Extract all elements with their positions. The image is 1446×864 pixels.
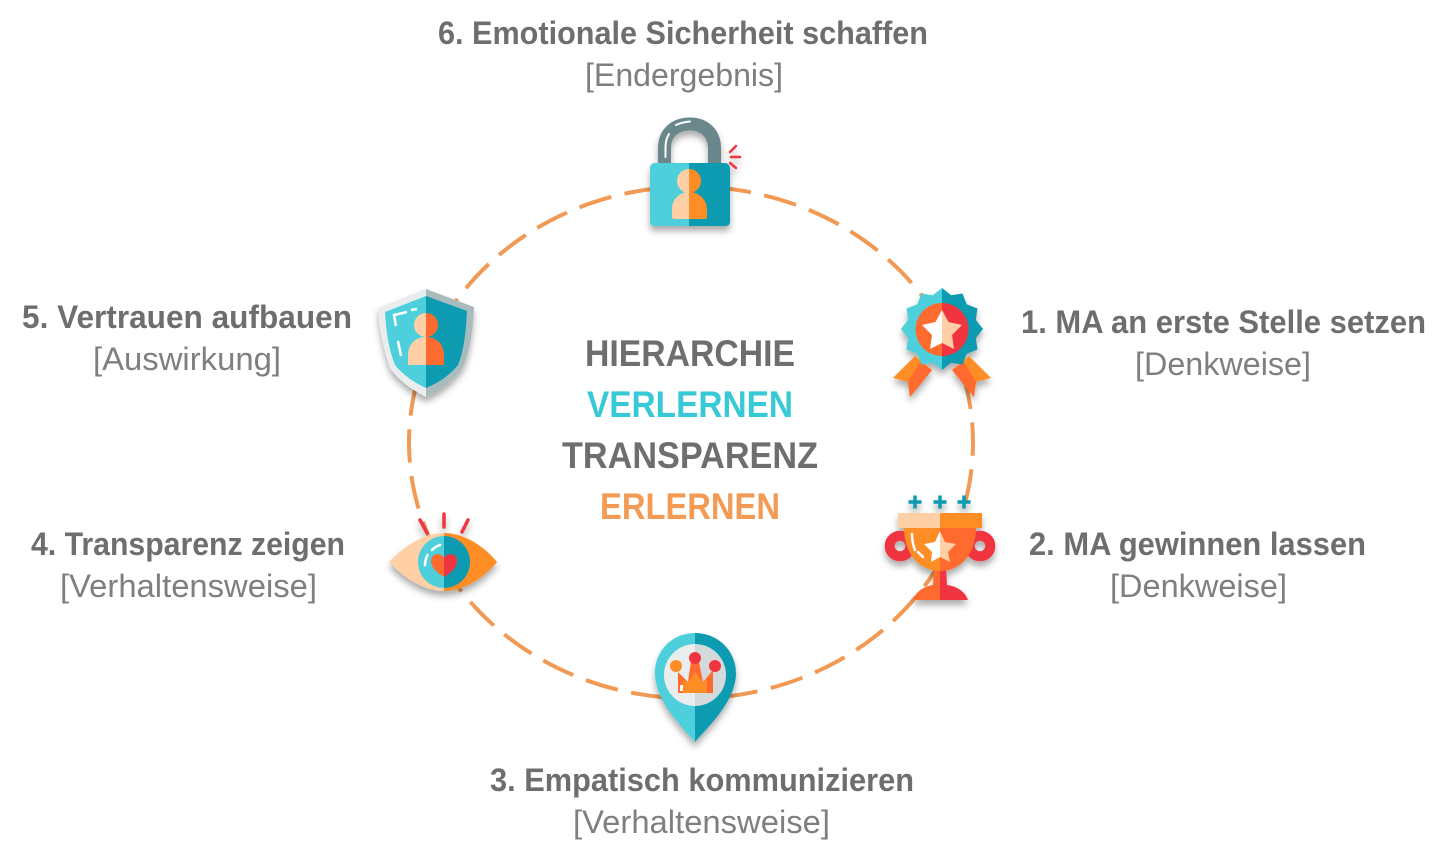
rays [420,514,468,533]
heading 3: 3. Empatisch kommunizieren [490,762,914,798]
label 5 [22,299,352,377]
heart [431,554,444,577]
eye white left [389,533,444,591]
shield frame right [426,289,474,397]
person [672,169,689,219]
star [924,531,940,562]
handles [890,536,910,556]
icon: shield with person [378,289,474,397]
shield frame left [378,289,426,397]
heading 4: 4. Transparenz zeigen [31,526,345,562]
category 3: [Verhaltensweise] [573,804,830,840]
highlight [394,309,417,356]
medal disc [916,303,942,356]
spark lines [730,146,740,168]
icon: trophy [890,496,990,600]
base and stem [913,568,940,600]
person [408,313,426,365]
dashed ring [409,186,973,698]
center line: ERLERNEN: ERLERNEN [600,486,780,527]
center line: TRANSPARENZ: TRANSPARENZ [562,435,818,476]
label 6 [438,15,928,93]
center line: HIERARCHIE: HIERARCHIE [585,333,795,374]
rim [898,513,940,528]
label 3 [490,762,914,840]
shield inner left [385,296,426,388]
iris highlight [425,545,440,565]
category 1: [Denkweise] [1135,346,1311,382]
cup [904,528,940,571]
shackle [664,124,714,166]
rosette left [901,288,942,370]
icon: padlock with person [650,122,740,226]
rosette right [942,288,983,370]
crown [678,657,713,693]
lock body left [650,163,689,226]
heading 2: 2. MA gewinnen lassen [1029,526,1366,562]
pin disc [664,644,695,706]
eye white right [444,533,497,591]
category 6: [Endergebnis] [585,57,783,93]
star [922,310,942,349]
lock body right [689,163,730,226]
center title [562,333,818,527]
ribbons [893,356,932,397]
shield inner right [426,296,467,388]
label 4 [31,526,345,604]
plus signs [908,496,970,508]
icon: map pin with crown [655,633,736,742]
cup highlight [912,534,923,557]
pin [655,633,695,742]
center line: VERLERNEN: VERLERNEN [587,384,793,425]
label 1 [1021,304,1426,382]
heading 5: 5. Vertrauen aufbauen [22,299,352,335]
label 2 [1029,526,1366,604]
category 4: [Verhaltensweise] [60,568,317,604]
iris [418,536,444,588]
heading 6: 6. Emotionale Sicherheit schaffen [438,15,928,51]
category 5: [Auswirkung] [93,341,281,377]
icon: award badge [893,288,991,397]
category 2: [Denkweise] [1110,568,1287,604]
heading 1: 1. MA an erste Stelle setzen [1021,304,1426,340]
icon: eye with heart [389,514,497,591]
